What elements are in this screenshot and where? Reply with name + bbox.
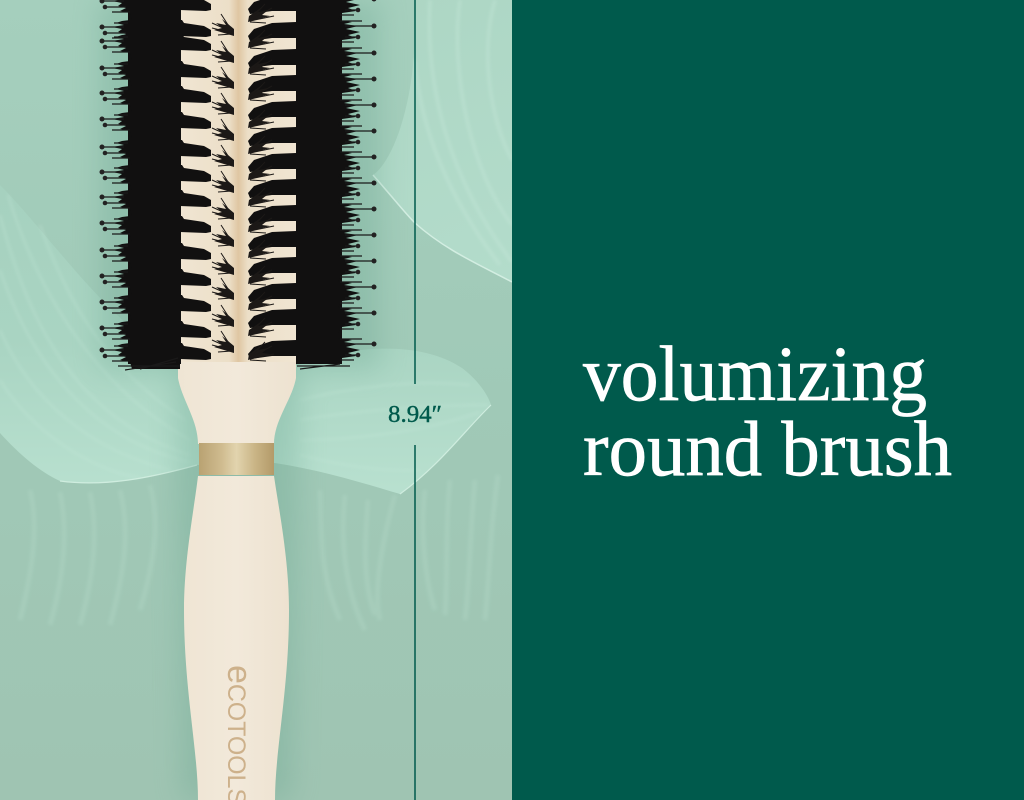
brush (100, 0, 376, 800)
leaf: lower streaks (20, 475, 498, 630)
brush handle (184, 476, 289, 800)
bristles right (248, 0, 376, 369)
leaf veins (0, 195, 488, 478)
panel: leaf background (0, 0, 512, 800)
lower stray bristles (118, 358, 180, 370)
title: round brush (583, 405, 952, 492)
leaf: large central leaf (0, 185, 491, 494)
gold ring (199, 443, 274, 475)
brush barrel (180, 0, 297, 362)
title: volumizing (583, 330, 927, 417)
panel: title background (512, 0, 1024, 800)
bristles centre (212, 4, 274, 361)
title (583, 330, 952, 492)
brush shadow (100, 0, 380, 800)
lower stray bristles right (297, 364, 350, 369)
dimension label: 8.94″ (388, 402, 442, 428)
brush neck (178, 360, 296, 444)
leaf edges (60, 405, 491, 494)
bristles left (100, 0, 211, 370)
leaf: upper right leaf (373, 0, 512, 282)
